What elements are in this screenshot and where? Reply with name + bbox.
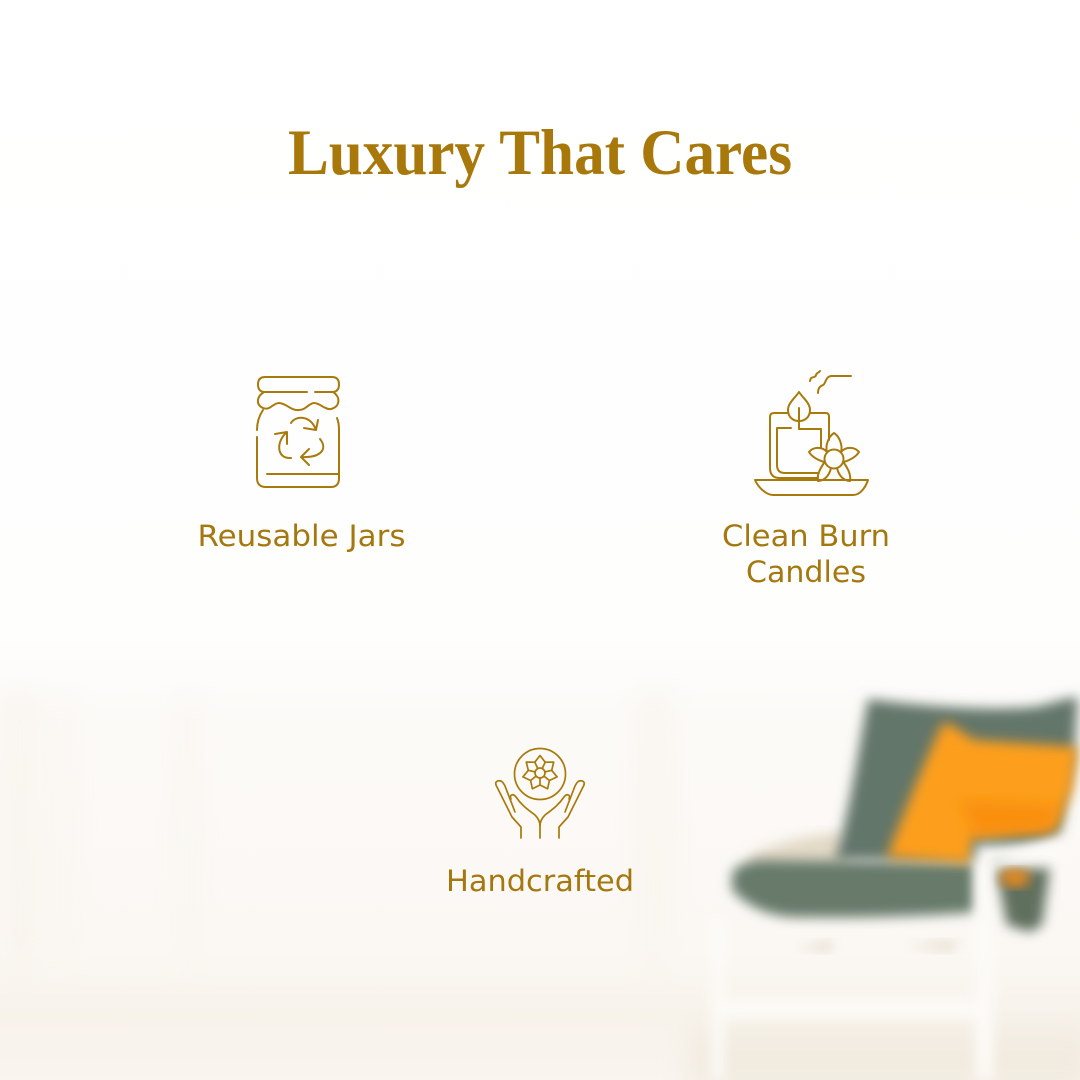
pillow lower shade xyxy=(960,800,1060,836)
floor shade under chair xyxy=(690,1030,1080,1080)
label: clean burn candles: Clean Burn xyxy=(722,519,890,553)
chair side gap xyxy=(996,868,1050,932)
label: reusable jars: Reusable Jars xyxy=(198,519,406,553)
title: Luxury That Cares xyxy=(288,117,792,189)
cushion shadow xyxy=(750,832,850,866)
icon: candle with flower xyxy=(755,371,868,495)
blurred chair xyxy=(690,697,1080,1080)
white chair frame xyxy=(712,845,1066,1080)
item: clean burn candles xyxy=(722,371,890,589)
icon: hands holding flower xyxy=(496,748,584,838)
item: clean burn candles: Candles xyxy=(746,555,866,589)
orange through gap xyxy=(1000,869,1030,887)
label: handcrafted: Handcrafted xyxy=(446,864,634,898)
chair back xyxy=(835,697,1078,860)
chair slat shadow xyxy=(796,940,960,952)
item: handcrafted xyxy=(446,748,634,898)
icon: recycling jar xyxy=(257,377,339,487)
item: reusable jars xyxy=(198,377,406,553)
orange pillow xyxy=(887,723,1078,863)
chair seat xyxy=(732,860,975,917)
